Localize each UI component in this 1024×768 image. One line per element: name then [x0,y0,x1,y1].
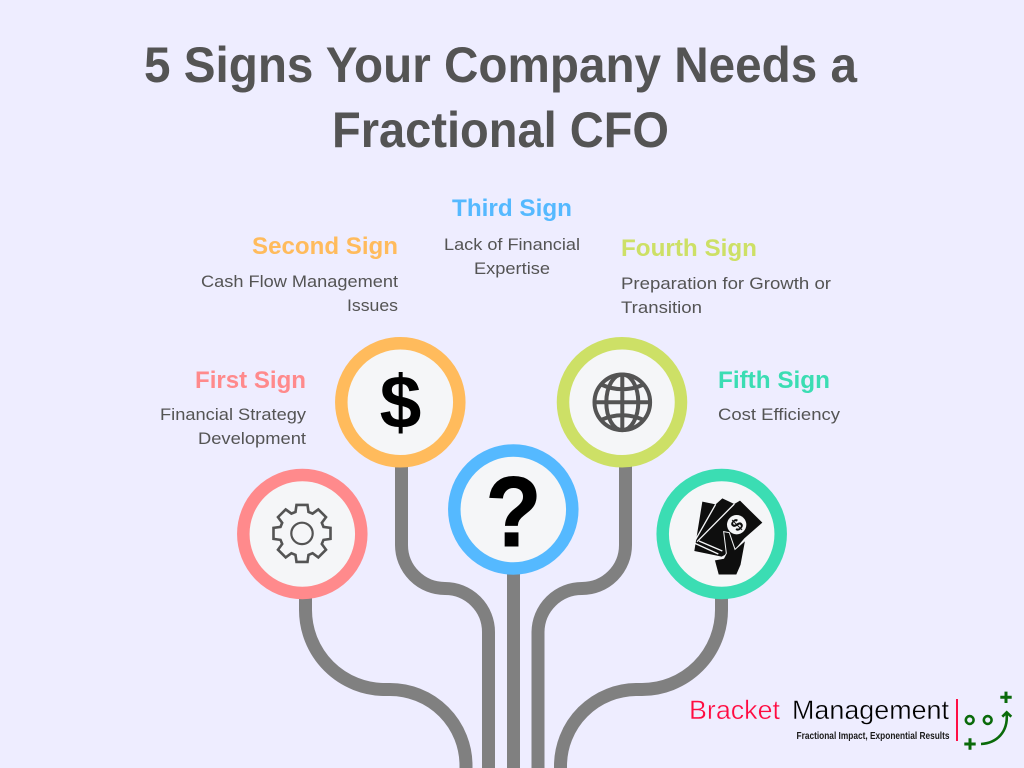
sign 2 label: Second Sign: Issues [347,296,398,315]
logo wordmark [689,695,949,725]
title: Fractional CFO [332,102,669,158]
logo: Bracket Management [689,692,1012,750]
sign 2 label: Second Sign: Second Sign [252,233,398,260]
connector pipes [306,462,722,768]
sign 2 label: Second Sign [201,233,398,315]
logo tagline: Fractional Impact, Exponential Results [796,730,950,742]
circle 5 with money in hand icon [663,475,781,593]
sign 3 label: Third Sign: Third Sign [452,195,572,222]
sign 5 label: Fifth Sign: Fifth Sign [718,367,830,394]
sign 4 label: Fourth Sign [621,235,831,317]
sign 4 label: Fourth Sign: Transition [621,298,702,317]
sign 4 label: Fourth Sign: Fourth Sign [621,235,757,262]
icon: dollar sign: $ [380,360,421,444]
sign 4 label: Fourth Sign: Preparation for Growth or [621,274,831,293]
sign 5 label: Fifth Sign: Cost Efficiency [718,405,841,424]
circle 4 with globe icon [563,343,681,461]
icon: globe [594,374,650,430]
sign 1 label: First Sign: Financial Strategy [160,405,307,424]
sign 3 label: Third Sign [444,195,580,278]
logo wordmark: Management [792,695,949,725]
icon: question mark: ? [486,458,541,568]
sign 1 label: First Sign: First Sign [195,367,306,394]
sign 3 label: Third Sign: Lack of Financial [444,235,580,254]
title: 5 Signs Your Company Needs a [144,37,858,93]
title [144,37,858,158]
sign 3 label: Third Sign: Expertise [474,259,550,278]
sign 1 label: First Sign [160,367,307,448]
logo play diagram [964,692,1012,750]
icon: gear [274,505,330,562]
circle 3 with question mark icon [454,450,572,568]
sign 2 label: Second Sign: Cash Flow Management [201,272,398,291]
logo divider [956,699,958,741]
circle 1 with gear icon [243,475,361,593]
sign 5 label: Fifth Sign [718,367,841,424]
sign 1 label: First Sign: Development [198,429,306,448]
logo wordmark: Bracket [689,695,780,725]
icon: hand holding cash: $ [726,514,748,535]
circle 2 with dollar icon [341,343,459,461]
